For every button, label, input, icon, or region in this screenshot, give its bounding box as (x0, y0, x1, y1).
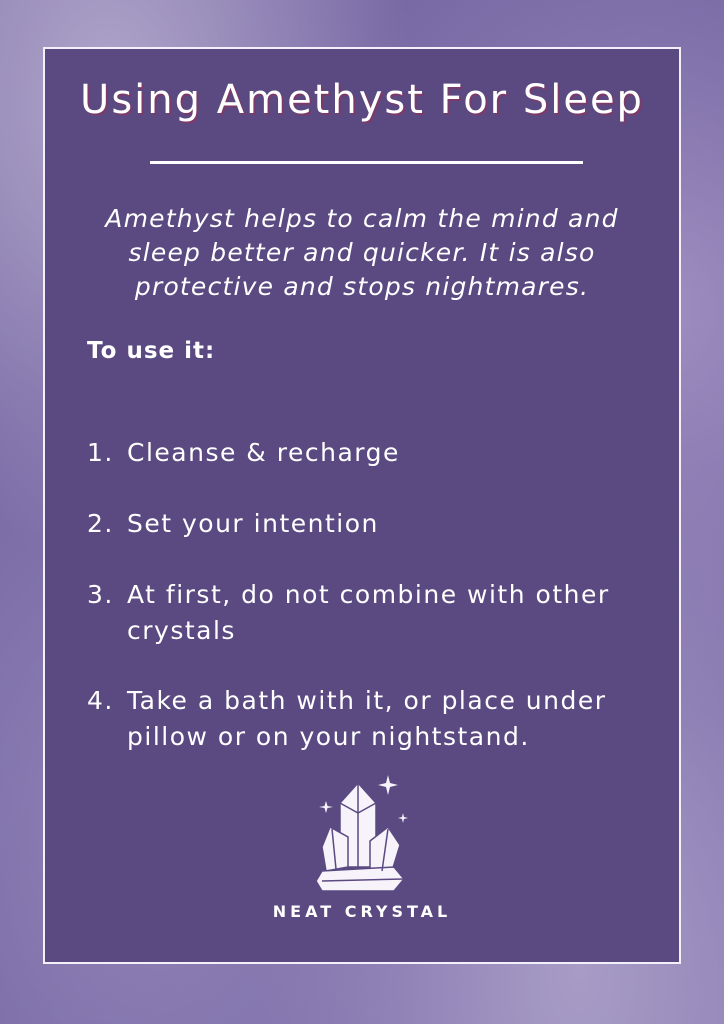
panel: main card: pillow or on your nightstand. (127, 722, 530, 751)
panel: main card: Take a bath with it, or place under (127, 686, 606, 715)
divider line (150, 161, 583, 164)
title: Using Amethyst For Sleep (80, 77, 644, 123)
panel: main card (43, 47, 681, 964)
intro text: Amethyst helps to calm the mind and (105, 204, 619, 233)
panel: main card: 2. (87, 509, 114, 538)
subheading: To use it: (87, 338, 215, 364)
panel: main card: 1. (87, 438, 114, 467)
intro text: protective and stops nightmares. (135, 272, 589, 301)
panel: main card: 3. (87, 580, 114, 609)
list of steps (87, 438, 610, 751)
intro text: sleep better and quicker. It is also (129, 238, 595, 267)
icon: crystal cluster (316, 775, 408, 890)
panel: main card: Set your intention (127, 509, 379, 538)
intro text (104, 204, 619, 301)
panel: main card: 4. (87, 686, 114, 715)
panel: main card: crystals (127, 616, 236, 645)
brand name: NEAT CRYSTAL (273, 902, 451, 921)
panel: main card: At first, do not combine with other (127, 580, 610, 609)
panel: main card: Cleanse & recharge (127, 438, 400, 467)
